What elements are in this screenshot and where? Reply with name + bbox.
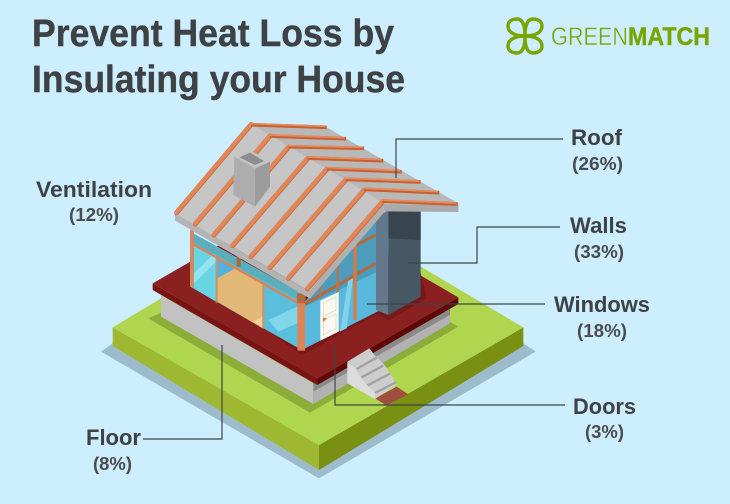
wall pillar xyxy=(376,210,421,315)
leader line: walls xyxy=(408,227,560,263)
house shadow xyxy=(184,210,427,355)
title: Insulating your House xyxy=(32,59,405,101)
lawn block xyxy=(113,205,523,470)
roof ribs: slope xyxy=(177,125,382,289)
label: windows xyxy=(554,292,650,341)
icon: clover xyxy=(508,19,542,53)
door xyxy=(320,292,339,341)
label: doors: Doors xyxy=(573,394,636,419)
label: doors: (3%) xyxy=(585,422,624,442)
illustration: base and foundation xyxy=(101,202,536,478)
roof ribs: overhang xyxy=(251,125,458,204)
leader line: floor xyxy=(143,345,222,439)
stair risers xyxy=(357,358,396,393)
label: roof xyxy=(571,125,623,174)
label: roof: (26%) xyxy=(572,154,623,174)
red slab xyxy=(153,202,458,385)
label: walls: (33%) xyxy=(574,242,624,262)
label: windows: (18%) xyxy=(577,321,627,341)
label: ventilation: (12%) xyxy=(69,205,119,225)
brick path xyxy=(375,387,408,406)
corner post xyxy=(290,293,313,351)
wordmark: GREEN xyxy=(551,23,628,51)
label: walls xyxy=(570,213,627,262)
label: floor: Floor xyxy=(86,425,141,450)
stair surface xyxy=(347,348,397,399)
illustration: house xyxy=(175,123,458,355)
label: floor xyxy=(86,425,141,474)
label: ventilation xyxy=(36,177,152,225)
label: doors xyxy=(573,394,636,442)
label: ventilation: Ventilation xyxy=(36,177,152,202)
label: floor: (8%) xyxy=(93,454,132,474)
foundation shadow xyxy=(148,280,458,413)
logo: GreenMatch xyxy=(508,19,710,53)
leader line: windows xyxy=(367,303,545,305)
leader line: roof xyxy=(396,139,563,178)
stair side xyxy=(347,362,375,399)
glass wall: left xyxy=(190,230,302,350)
leader line: doors xyxy=(335,345,565,405)
logo: GreenMatch: MATCH xyxy=(628,23,710,51)
label: roof: Roof xyxy=(571,125,623,150)
illustration: steps xyxy=(347,348,408,406)
foundation xyxy=(161,295,450,404)
left roof slope xyxy=(175,123,382,292)
label: walls: Walls xyxy=(570,213,627,238)
label: windows: Windows xyxy=(554,292,650,317)
right roof slope xyxy=(250,123,458,212)
ground shadow xyxy=(101,343,536,478)
chimney xyxy=(233,150,270,207)
title: Prevent Heat Loss by xyxy=(32,13,394,55)
roof xyxy=(175,123,458,299)
glass wall: right xyxy=(297,212,381,351)
title xyxy=(32,13,405,101)
